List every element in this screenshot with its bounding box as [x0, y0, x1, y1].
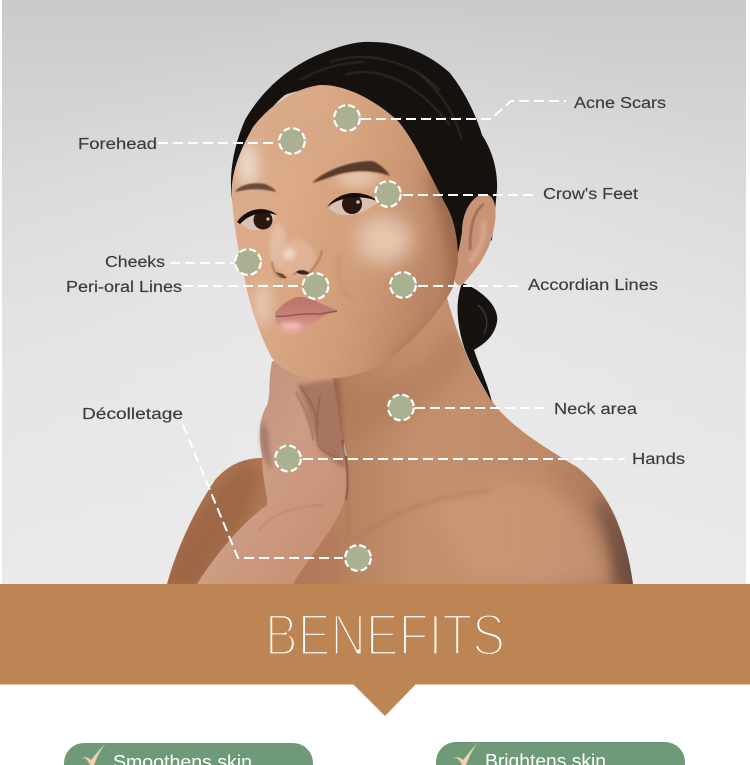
point: cheeks — [235, 249, 261, 275]
benefit pill: smoothens skin — [64, 743, 313, 765]
leader: accordian lines — [418, 285, 522, 287]
shoulders and neck — [165, 290, 633, 584]
face — [232, 85, 470, 380]
label: peri-oral lines: Peri-oral Lines — [66, 279, 182, 296]
label: crow's feet: Crow's Feet — [543, 186, 639, 203]
heading: BENEFITS — [265, 603, 505, 668]
point: decolletage — [345, 545, 371, 571]
ear — [453, 194, 496, 285]
hair — [231, 42, 497, 262]
icon: check mark — [453, 742, 478, 765]
label: decolletage: Décolletage — [82, 406, 183, 423]
nose — [272, 239, 322, 278]
right eyebrow — [312, 161, 390, 183]
point: crow's feet — [375, 181, 401, 207]
banner band — [0, 584, 750, 684]
point: hands — [275, 446, 301, 471]
right eye — [327, 193, 380, 215]
label: acne scars: Acne Scars — [574, 95, 666, 112]
callout markers and leader lines — [158, 101, 625, 558]
studio backdrop — [2, 0, 746, 584]
left eyebrow — [235, 183, 276, 192]
treatment point circles — [235, 105, 416, 571]
label: neck area: Neck area — [554, 401, 637, 418]
icon: check mark — [81, 743, 106, 765]
portrait photo illustration — [2, 0, 746, 584]
leader: acne scars — [361, 101, 566, 119]
point: acne scars — [334, 105, 360, 131]
hand — [197, 355, 347, 584]
lips — [275, 297, 338, 334]
left eye — [237, 209, 277, 230]
area labels — [66, 95, 685, 468]
label: cheeks: Cheeks — [105, 254, 165, 271]
gaps between fingers and neck — [343, 442, 347, 456]
leader: decolletage — [183, 425, 343, 558]
label: forehead: Forehead — [78, 136, 157, 153]
leader: hands — [303, 458, 625, 460]
benefit pill: brightens skin — [436, 742, 685, 765]
leader: peri-oral lines — [183, 285, 301, 287]
benefits banner — [0, 584, 750, 716]
banner pointer — [353, 684, 416, 716]
leader: neck area — [415, 407, 550, 409]
point: accordian lines — [390, 272, 416, 298]
face shading and highlights — [233, 139, 458, 356]
label: accordian lines: Accordian Lines — [528, 277, 658, 294]
leader: cheeks — [170, 262, 234, 264]
hair bun and strand — [458, 283, 497, 402]
label: hands: Hands — [632, 451, 685, 468]
point: forehead — [279, 128, 305, 154]
point: neck area — [388, 395, 414, 420]
point: peri-oral lines — [303, 273, 328, 299]
leader: forehead — [158, 142, 278, 144]
leader: crow's feet — [403, 194, 537, 196]
